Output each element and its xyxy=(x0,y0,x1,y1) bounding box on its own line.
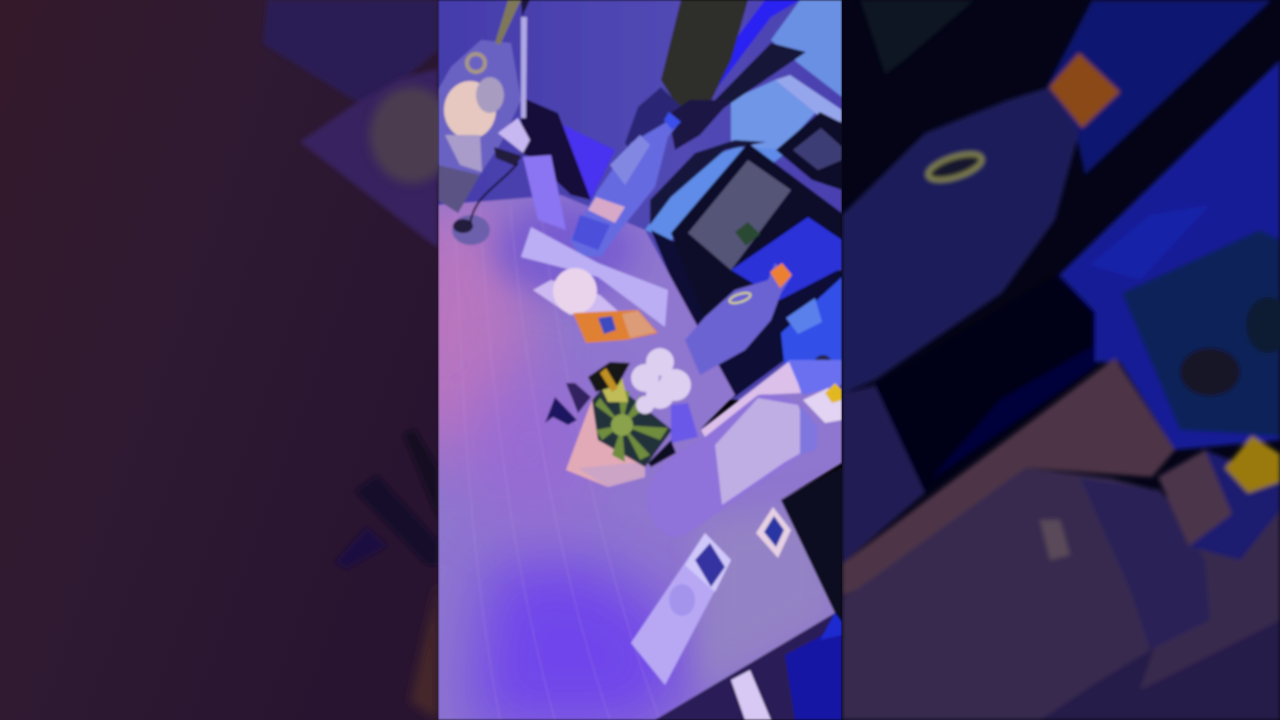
blurred power strip xyxy=(263,0,438,110)
bright blue reflection xyxy=(563,125,615,200)
blue glow strip xyxy=(718,0,800,87)
back wall xyxy=(438,0,842,400)
glass bottle with tape roll xyxy=(438,0,530,213)
succulent leaves xyxy=(595,388,668,462)
table lighting xyxy=(438,198,837,720)
black cylinder with gold band xyxy=(588,362,630,392)
white jar xyxy=(553,268,597,314)
monitor xyxy=(781,467,842,622)
blurred paper sheet xyxy=(300,69,438,248)
panel: left blurred background xyxy=(0,0,454,720)
blurred yellow cap xyxy=(1225,436,1280,493)
wood grain xyxy=(526,592,653,701)
clear bottle with orange cap xyxy=(685,263,792,375)
panel: centre photo xyxy=(438,0,842,720)
blurred blue panel xyxy=(1059,60,1280,450)
below table xyxy=(655,613,842,720)
chair back second xyxy=(776,112,842,190)
blurred round sockets xyxy=(1180,348,1240,396)
plant leaves xyxy=(625,0,806,225)
desk shadow wedge xyxy=(521,97,591,200)
blue reflection around cap xyxy=(1189,450,1280,560)
cable and grommet xyxy=(452,163,518,245)
dark base under chairs xyxy=(651,230,842,400)
chair mesh grey xyxy=(688,160,791,270)
white paper under jar xyxy=(533,280,620,315)
shelf area xyxy=(731,80,815,153)
blurred jar xyxy=(368,84,438,186)
orange sachets xyxy=(573,310,658,343)
blue socket panel xyxy=(781,277,842,373)
blurred black block xyxy=(875,275,1095,493)
water bottle with label xyxy=(570,112,681,257)
blurred white label strip xyxy=(842,358,1175,596)
table top xyxy=(438,195,842,720)
blue floor glow xyxy=(785,625,842,720)
flower pot with succulent xyxy=(566,348,691,487)
blurred socket recess xyxy=(1122,230,1280,436)
chair mesh blue xyxy=(731,217,842,300)
large glass bottle xyxy=(647,394,819,537)
black jar piece xyxy=(648,440,676,467)
blurred table right area xyxy=(842,468,1280,720)
white bottle label xyxy=(701,360,801,437)
blurred large bottle xyxy=(842,53,1120,394)
remote control xyxy=(631,533,731,685)
white box and connector xyxy=(494,118,530,166)
small framed card xyxy=(756,507,791,558)
panel: right blurred background xyxy=(842,0,1280,720)
blurred dark cylinders xyxy=(335,429,438,569)
blue base behind pot xyxy=(671,403,698,443)
light blue wall xyxy=(771,0,842,97)
blurred left table strip xyxy=(842,385,925,564)
power strip xyxy=(521,227,668,327)
chair back main xyxy=(671,143,842,320)
blurred chair mesh xyxy=(860,0,975,75)
white bottle cap xyxy=(788,360,842,423)
paper strip xyxy=(523,155,566,230)
blurred pot corner xyxy=(409,596,438,718)
small dark cylinders xyxy=(545,383,591,425)
blurred white bottle neck xyxy=(1158,450,1232,546)
blurred glass bottle xyxy=(842,468,1210,720)
table leg xyxy=(731,670,771,720)
white flower xyxy=(631,348,691,414)
